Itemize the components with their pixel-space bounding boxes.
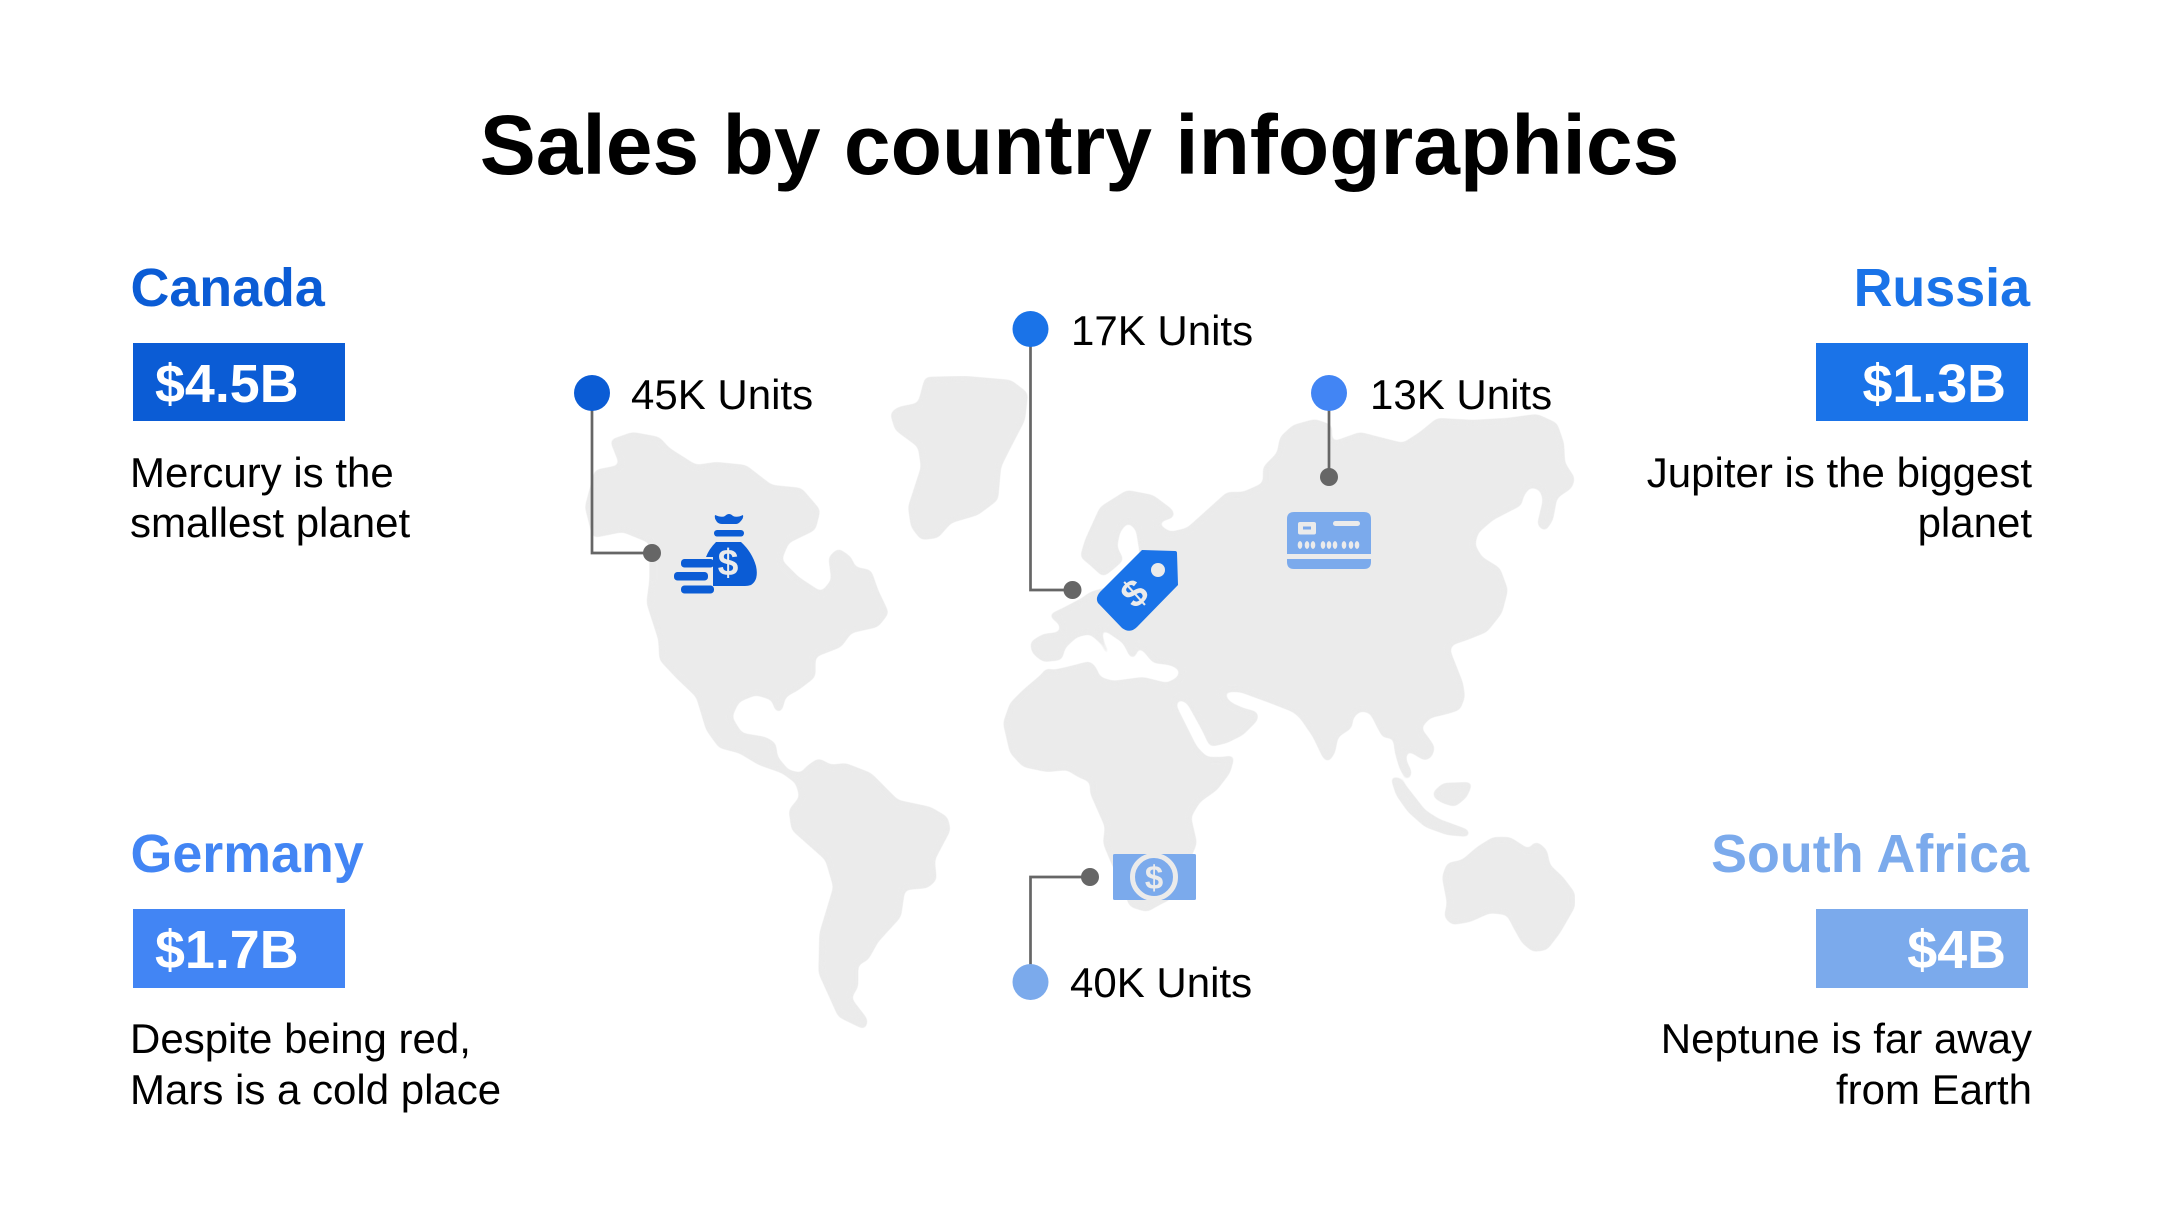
marker: 13K Units (1311, 371, 1552, 486)
value box: $4.5B (133, 343, 345, 421)
map: Australia (1442, 837, 1575, 952)
value box: $1.7B: $1.7B (155, 920, 299, 980)
description: South Africa: from Earth (1836, 1066, 2032, 1113)
description: Germany: Despite being red, (130, 1015, 471, 1062)
world map (585, 376, 1575, 1030)
map: Sumatra and Java (1390, 776, 1470, 837)
icon: banknote (1113, 854, 1196, 900)
value box: $1.3B: $1.3B (1862, 354, 2006, 414)
map: Americas (585, 432, 951, 1030)
icon: price tag (1097, 550, 1178, 631)
value box: $1.3B (1816, 343, 2028, 421)
value box: $4B: $4B (1907, 920, 2006, 980)
title: Sales by country infographics (480, 98, 1679, 192)
panel: Russia (1647, 258, 2032, 546)
panel: Canada (130, 258, 410, 546)
description: Russia: planet (1918, 499, 2032, 546)
marker: 13K Units: 13K Units (1370, 371, 1552, 418)
marker: 45K Units: 45K Units (631, 371, 813, 418)
panel: South Africa (1661, 824, 2032, 1113)
value box: $4.5B: $4.5B (155, 354, 299, 414)
icon: banknote: $ (1145, 859, 1163, 896)
map: Greenland (890, 376, 1028, 540)
description: Canada: smallest planet (130, 499, 410, 546)
icon: credit card (1287, 512, 1371, 569)
value box: $4B (1816, 909, 2028, 988)
marker: 45K Units (574, 371, 813, 562)
marker: 40K Units (1012, 868, 1252, 1006)
map: Eurasia and Africa (1003, 414, 1575, 912)
marker: 40K Units: 40K Units (1070, 959, 1252, 1006)
heading: Russia: Russia (1854, 258, 2031, 318)
description: South Africa: Neptune is far away (1661, 1015, 2032, 1062)
marker: 17K Units (1012, 307, 1253, 599)
icon: money bag (674, 514, 757, 594)
heading: Germany: Germany (130, 824, 364, 884)
value box: $1.7B (133, 909, 345, 988)
description: Germany: Mars is a cold place (130, 1066, 501, 1113)
description: Russia: Jupiter is the biggest (1647, 449, 2032, 496)
marker: 17K Units: 17K Units (1071, 307, 1253, 354)
description: Canada: Mercury is the (130, 449, 394, 496)
heading: South Africa: South Africa (1711, 824, 2030, 884)
icon: money bag: $ (718, 542, 739, 583)
map: Borneo (1433, 782, 1473, 807)
icon: price tag: $ (1113, 571, 1157, 617)
panel: Germany (130, 824, 501, 1113)
heading: Canada: Canada (130, 258, 326, 318)
